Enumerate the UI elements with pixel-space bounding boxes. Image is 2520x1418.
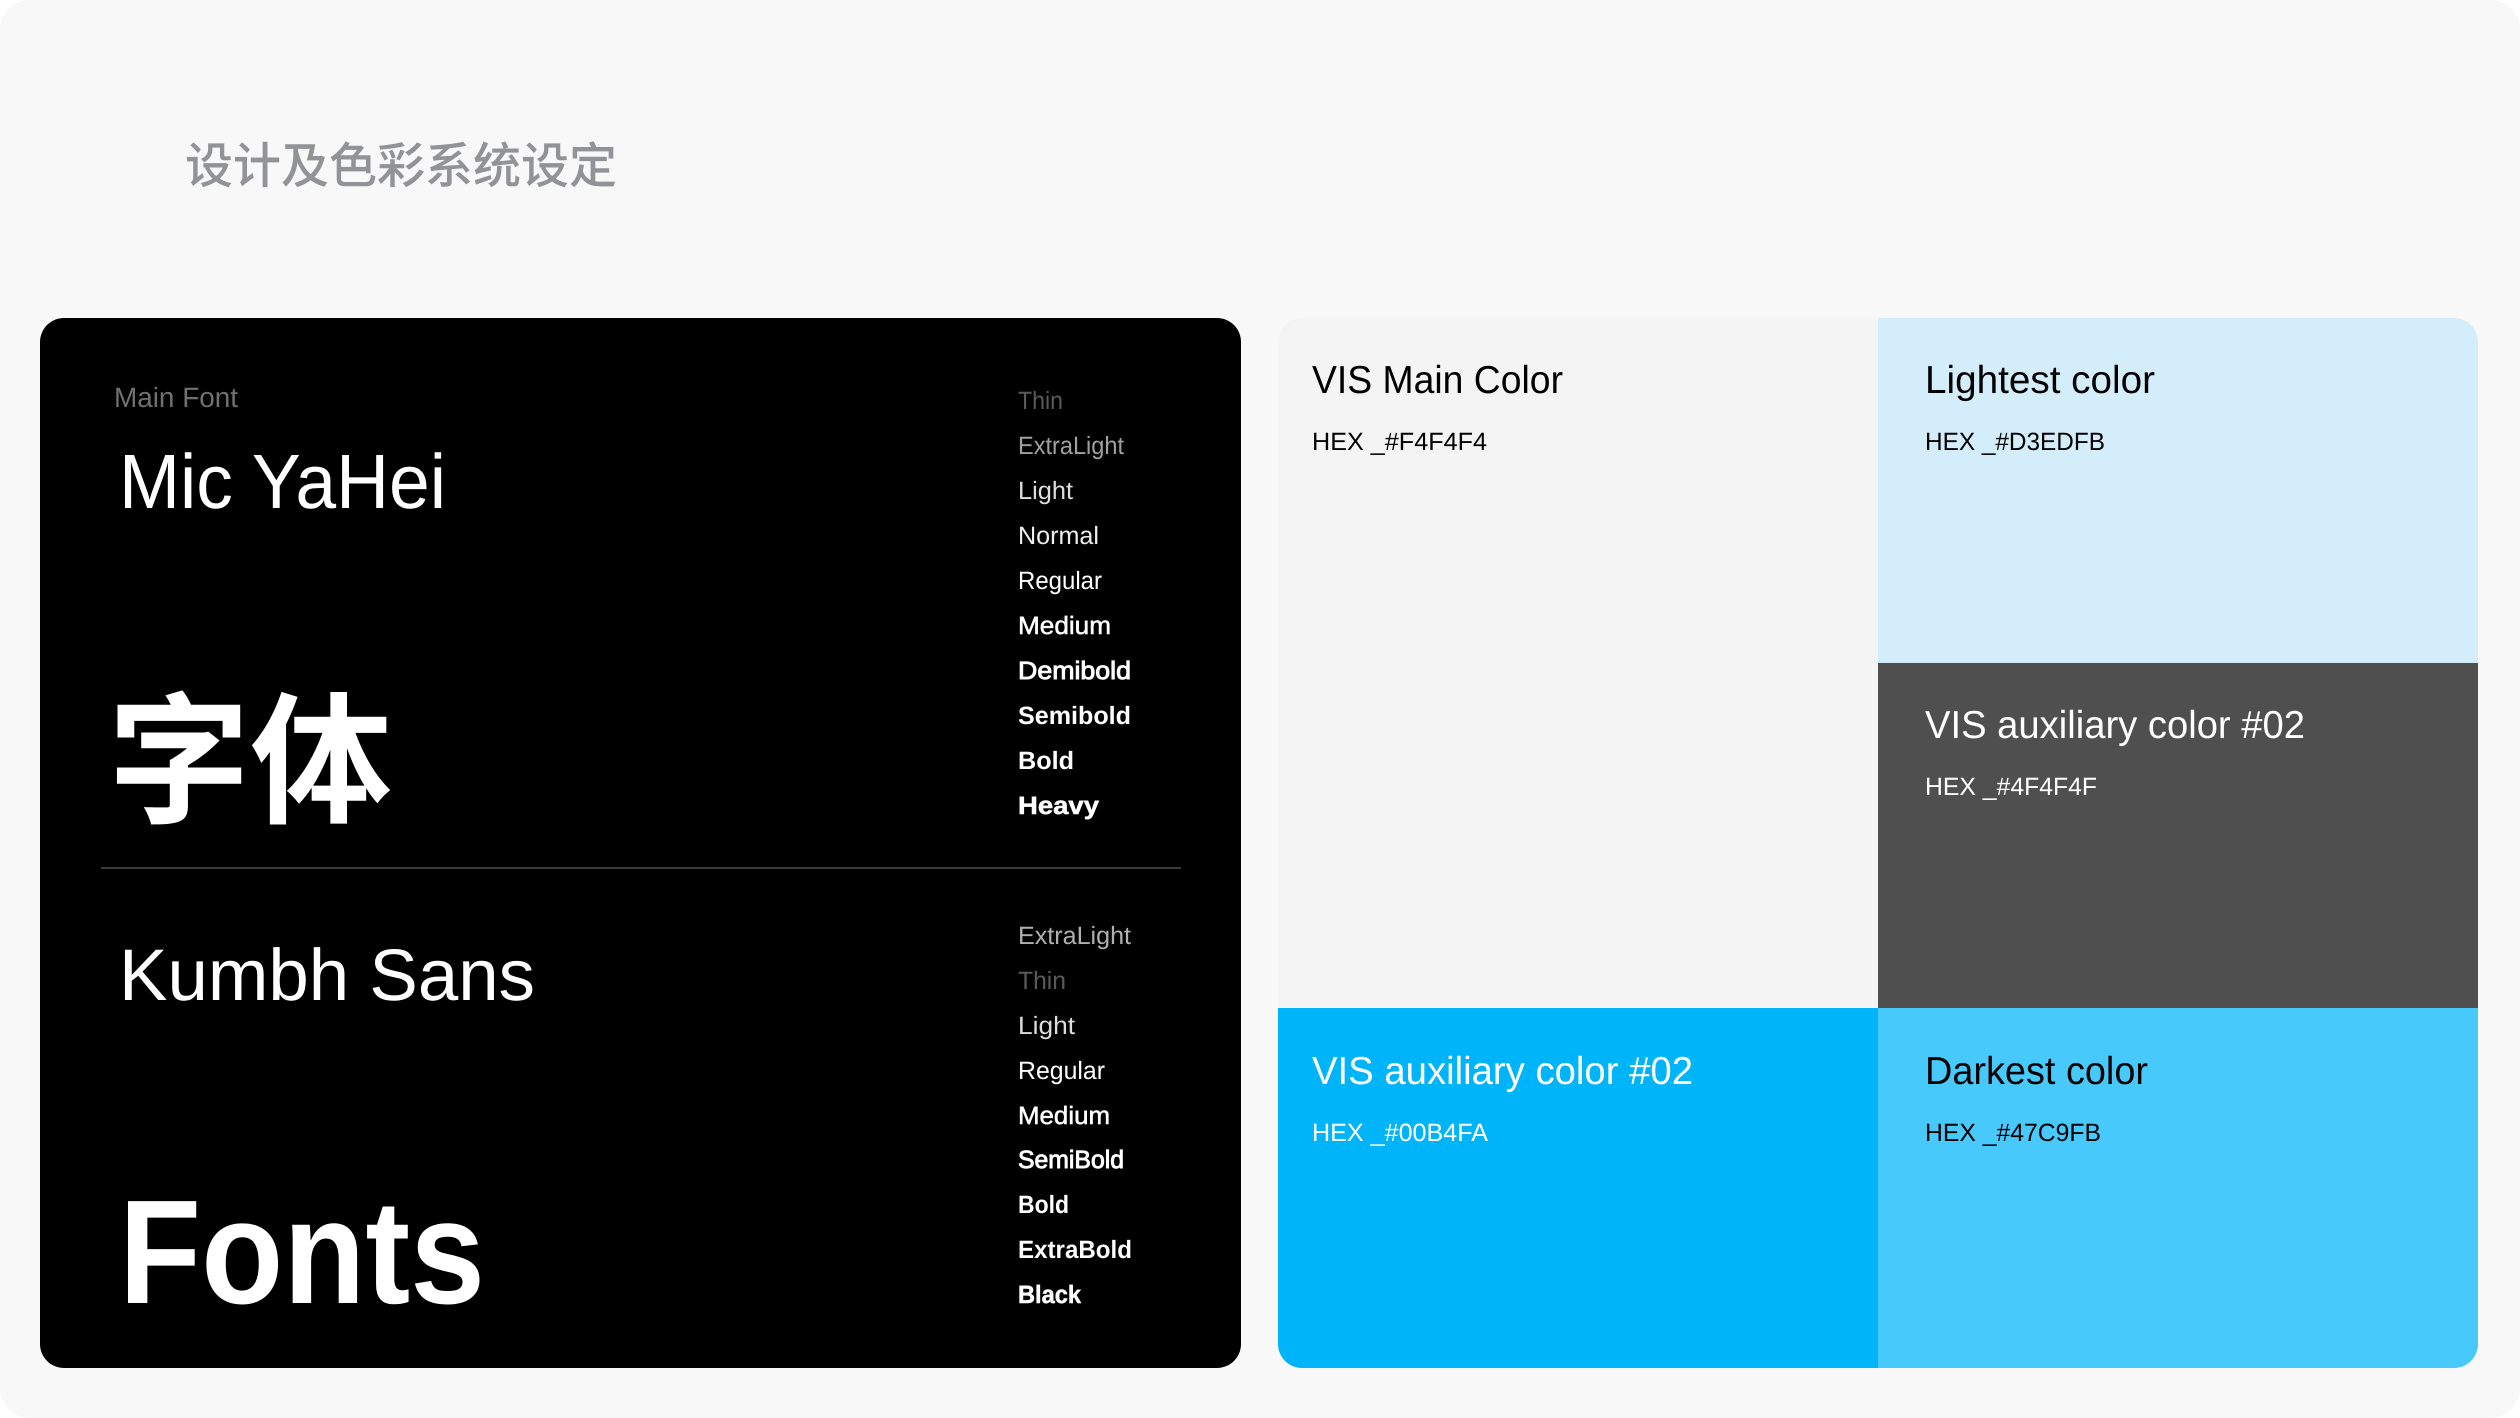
weight: Demibold: Demibold xyxy=(1018,657,1131,685)
weight: Bold: Bold xyxy=(1018,1191,1069,1219)
font name: Mic YaHei: Mic YaHei xyxy=(119,439,446,525)
weight: Thin: Thin xyxy=(1018,967,1066,995)
sample: Fonts: Fonts xyxy=(119,1170,485,1335)
weight: Heavy: Heavy xyxy=(1018,792,1099,820)
swatch title: VIS auxiliary color #02 xyxy=(1925,704,2305,747)
hex value: HEX _#D3EDFB xyxy=(1925,428,2105,456)
weight: Black: Black xyxy=(1018,1281,1081,1309)
weight: Light: Light xyxy=(1018,1012,1075,1040)
label: main font: Main Font xyxy=(114,382,238,413)
weight: ExtraBold: ExtraBold xyxy=(1018,1236,1132,1264)
title: 设计及色彩系统设定 xyxy=(185,127,617,198)
weight: Normal: Normal xyxy=(1018,522,1099,550)
weight: SemiBold: SemiBold xyxy=(1018,1146,1124,1174)
weight: Semibold: Semibold xyxy=(1018,702,1131,730)
hex value: HEX _#47C9FB xyxy=(1925,1119,2101,1147)
weight: Regular: Regular xyxy=(1018,1057,1105,1085)
weight: Light: Light xyxy=(1018,477,1073,505)
weight: Thin: Thin xyxy=(1018,387,1063,415)
sample: 字体: 字体 xyxy=(108,647,392,853)
weight: ExtraLight: ExtraLight xyxy=(1018,922,1131,950)
hex value: HEX _#4F4F4F xyxy=(1925,773,2097,801)
font name: Kumbh Sans: Kumbh Sans xyxy=(119,935,535,1016)
swatch title: Lightest color xyxy=(1925,359,2155,402)
swatch: darkest color xyxy=(1878,1008,2478,1368)
swatch: lightest color xyxy=(1878,318,2478,663)
hex value: HEX _#F4F4F4 xyxy=(1312,428,1487,456)
swatch title: Darkest color xyxy=(1925,1050,2148,1093)
hex value: HEX _#00B4FA xyxy=(1312,1119,1488,1147)
swatch title: VIS Main Color xyxy=(1312,359,1563,402)
weight list: Kumbh Sans xyxy=(1018,922,1132,1309)
weight list: Mic YaHei xyxy=(1018,387,1131,820)
weight: Regular: Regular xyxy=(1018,567,1102,595)
weight: ExtraLight: ExtraLight xyxy=(1018,432,1124,460)
swatch title: VIS auxiliary color #02 xyxy=(1312,1050,1693,1093)
swatch: auxiliary blue xyxy=(1278,1008,1878,1368)
panel: fonts xyxy=(40,318,1241,1368)
swatch: auxiliary gray xyxy=(1878,663,2478,1008)
panel: colors xyxy=(1278,318,2478,1368)
weight: Bold: Bold xyxy=(1018,747,1074,775)
weight: Medium: Medium xyxy=(1018,1102,1110,1130)
swatch: VIS main color xyxy=(1278,318,1878,1008)
weight: Medium: Medium xyxy=(1018,612,1111,640)
